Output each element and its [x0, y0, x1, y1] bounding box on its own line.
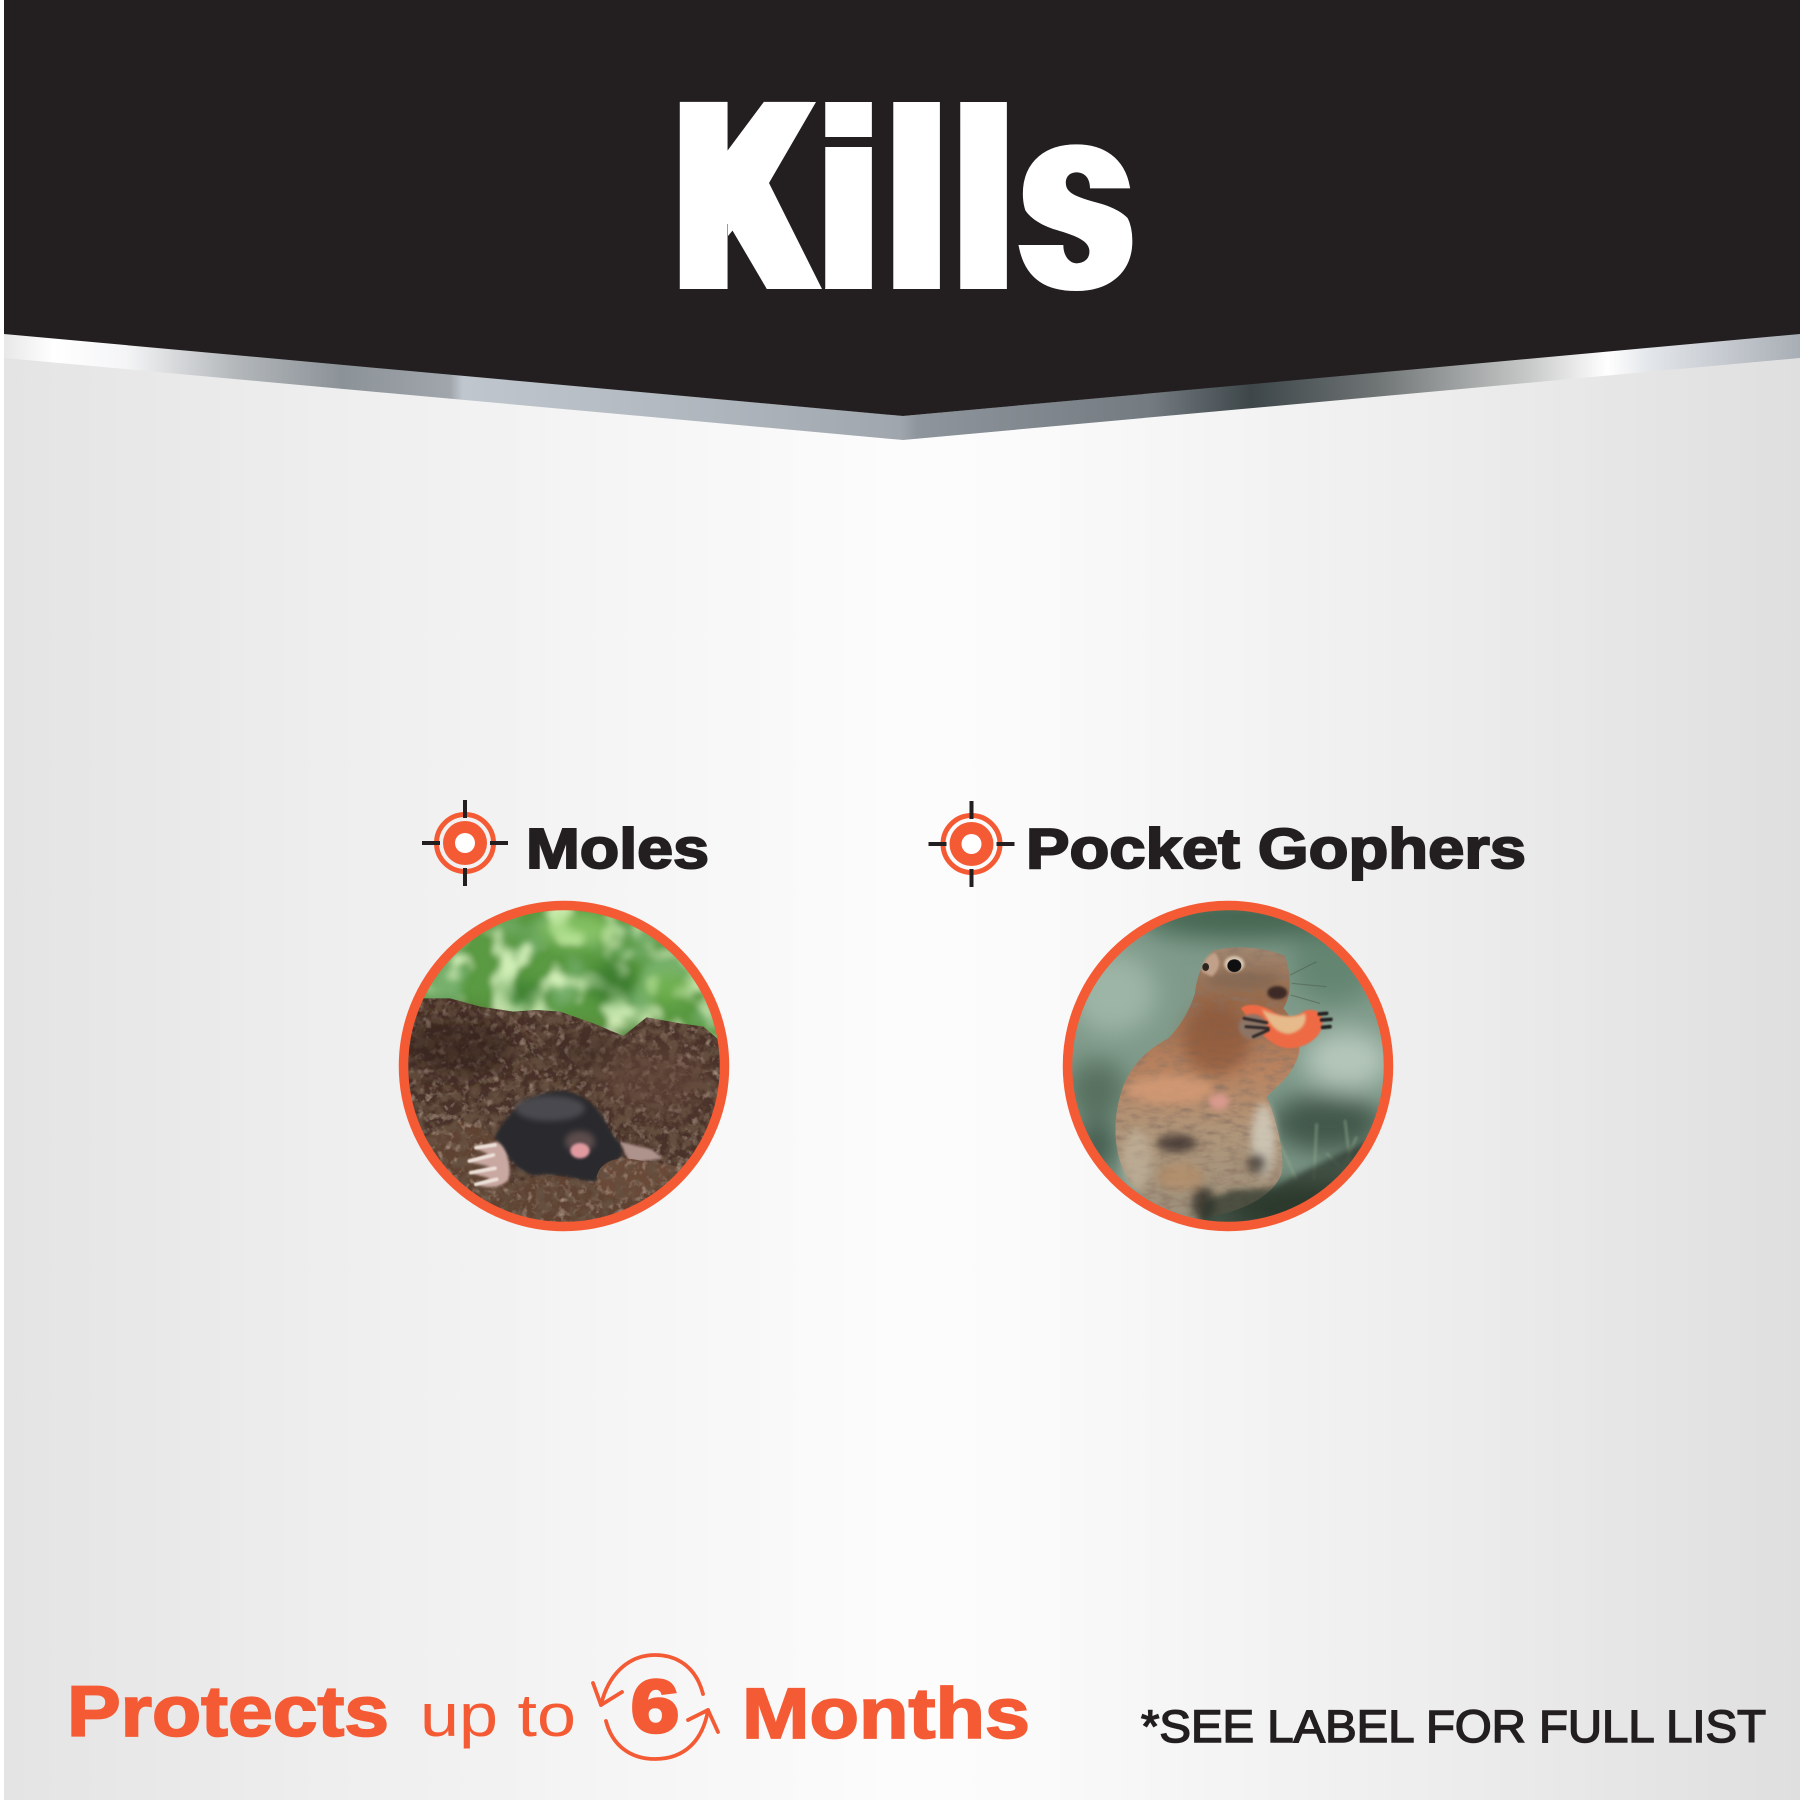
- text: months: Months: [742, 1675, 1030, 1754]
- foreground grass: [1196, 1139, 1366, 1222]
- label: pocket gophers: [928, 801, 1526, 887]
- lettuce backdrop: [424, 910, 718, 1038]
- blurred meadow backdrop: [1072, 910, 1384, 1222]
- photo: gopher eating: [1060, 893, 1397, 1233]
- gopher nose: [1267, 986, 1287, 999]
- heading: pocket gophers: Pocket Gophers: [1026, 817, 1526, 881]
- black header banner: [4, 0, 1800, 416]
- footer: protects up to 6 months: [67, 1655, 1030, 1759]
- front soil clods: [426, 1120, 690, 1222]
- carrot slice: [1241, 1005, 1323, 1048]
- text: up to: up to: [420, 1682, 576, 1749]
- gopher paw: [1239, 1014, 1268, 1039]
- soil clod right of nose: [597, 1159, 677, 1201]
- photo: mole in soil: [400, 903, 733, 1227]
- label: moles: [422, 800, 709, 886]
- gopher body: [1115, 947, 1299, 1220]
- icon: cycle arrows: [593, 1655, 718, 1759]
- gopher claws: [1319, 1013, 1331, 1027]
- gopher eye and ear: [1202, 953, 1244, 977]
- soil shading: [403, 1017, 710, 1113]
- soil mound: [408, 998, 720, 1184]
- title: Kills: [680, 68, 1126, 322]
- grass blades: [1275, 1120, 1357, 1180]
- mole body: [495, 1091, 622, 1182]
- text: protects: Protects: [67, 1673, 389, 1752]
- mole right paw: [620, 1142, 663, 1162]
- numeral 6: 6: [631, 1665, 679, 1748]
- footnote: *SEE LABEL FOR FULL LIST: [1141, 1701, 1766, 1752]
- mole nose: [570, 1143, 590, 1158]
- heading: moles: Moles: [526, 817, 709, 881]
- photo ring: [404, 906, 724, 1226]
- mole left paw: [468, 1142, 510, 1187]
- whiskers: [1290, 962, 1327, 1003]
- photo ring: [1068, 906, 1388, 1226]
- metallic chevron stripe: [4, 333, 1800, 440]
- icon: target moles: [422, 800, 508, 886]
- icon: target gophers: [928, 801, 1014, 887]
